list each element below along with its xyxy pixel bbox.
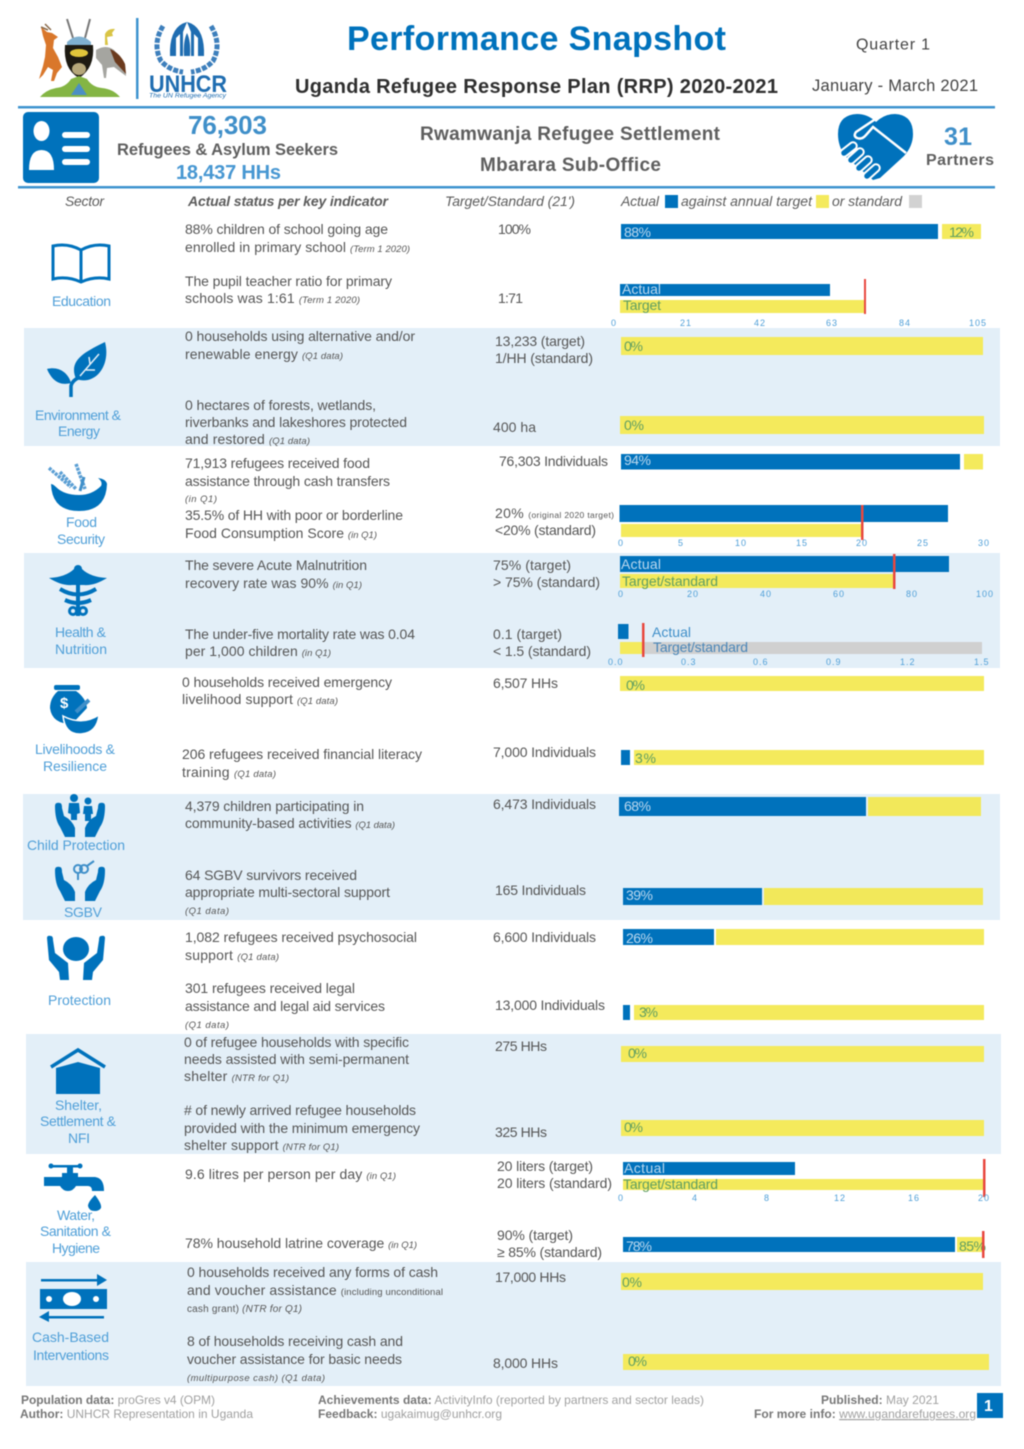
icon: hands with children xyxy=(55,794,105,837)
indicator: under-five mortality: The under-five mortality rate was 0.04 xyxy=(185,626,415,642)
indicator: pupil teacher ratio xyxy=(185,273,987,328)
sector label: Protection: Protection xyxy=(48,992,111,1008)
sector label: Water, Sanitation and Hygiene xyxy=(40,1207,112,1256)
indicator: legal assistance: 3% xyxy=(639,1004,658,1020)
indicator: food consumption score xyxy=(185,505,990,548)
indicator: basic needs: 8 of households receiving cash and xyxy=(187,1333,403,1349)
icon: caduceus xyxy=(49,565,107,616)
indicator: malnutrition recovery: 100 xyxy=(976,589,994,599)
icon: house xyxy=(51,1050,105,1094)
indicator: malnutrition recovery: 80 xyxy=(906,589,918,599)
icon: food bowl xyxy=(49,464,107,511)
column headers and legend: Sector xyxy=(65,193,105,209)
indicator: litres per day: 12 xyxy=(834,1193,846,1203)
indicator: latrine coverage: 78% xyxy=(626,1238,652,1254)
panel: livelihoods and resilience xyxy=(35,674,984,780)
sector label: Livelihoods and Resilience: Resilience xyxy=(43,758,107,774)
sector label: Food Security: Security xyxy=(57,531,105,547)
indicator: food assistance xyxy=(185,452,983,505)
indicator: renewable energy xyxy=(185,328,983,366)
column headers and legend: against annual target xyxy=(681,193,813,209)
indicator: renewable energy: 1/HH (standard) xyxy=(495,350,593,366)
indicator: renewable energy: 0 households using alternative and/or xyxy=(185,328,415,344)
column headers and legend: or standard xyxy=(832,193,903,209)
indicator: hectares protected: 0% xyxy=(624,417,644,433)
indicator: food consumption score: 10 xyxy=(735,538,747,548)
indicator: community activities: 4,379 children participating in xyxy=(185,798,364,814)
logo: UNHCR xyxy=(149,22,227,100)
indicator: pupil teacher ratio: 84 xyxy=(899,318,911,328)
indicator: SGBV support: 64 SGBV survivors received xyxy=(185,867,357,883)
indicator: under-five mortality: 1.5 xyxy=(974,657,990,667)
indicator: semi-permanent shelter: needs assisted with semi-permanent xyxy=(184,1051,409,1067)
indicator: malnutrition recovery: Target/standard xyxy=(622,573,718,589)
indicator: emergency shelter: shelter support (NTR for Q1) xyxy=(184,1137,339,1153)
indicator: semi-permanent shelter: 0 of refugee households with specific xyxy=(184,1034,409,1050)
indicator: pupil teacher ratio: 42 xyxy=(754,318,766,328)
indicator: under-five mortality: 0.1 (target) xyxy=(493,626,562,642)
indicator: psychosocial support: 26% xyxy=(626,930,653,946)
logo: UNHCR: UNHCR xyxy=(149,71,227,98)
indicator: food consumption score: 0 xyxy=(618,538,624,548)
icon: book xyxy=(53,245,109,282)
indicator: under-five mortality: 0.0 xyxy=(608,657,624,667)
indicator: malnutrition recovery: recovery rate was 90% (in Q1) xyxy=(185,575,362,591)
indicator: litres per day xyxy=(185,1158,990,1203)
indicator: under-five mortality: Target/standard xyxy=(653,639,748,655)
indicator: malnutrition recovery xyxy=(185,554,994,599)
quarter: Quarter 1 xyxy=(856,36,930,54)
sector label: Child Protection: Child Protection xyxy=(27,837,125,853)
indicator: malnutrition recovery: Actual xyxy=(621,556,661,572)
indicator: cash and voucher: 17,000 HHs xyxy=(495,1269,566,1285)
indicator: enrolment: 88% xyxy=(624,224,651,240)
indicator: basic needs: 0% xyxy=(628,1353,647,1369)
indicator: legal assistance: assistance and legal aid services xyxy=(185,998,385,1014)
indicator: financial literacy: training (Q1 data) xyxy=(182,764,276,780)
indicator: financial literacy: 206 refugees received financial literacy xyxy=(182,746,422,762)
header xyxy=(39,18,978,100)
indicator: food consumption score: 25 xyxy=(917,538,929,548)
indicator: hectares protected: 400 ha xyxy=(493,419,536,435)
indicator: cash and voucher: and voucher assistance (including unconditional xyxy=(187,1282,443,1298)
indicator: malnutrition recovery: 60 xyxy=(833,589,845,599)
indicator: renewable energy: 13,233 (target) xyxy=(495,333,585,349)
column headers and legend: Actual status per key indicator xyxy=(187,193,390,209)
icon: money bag and bowl: $ xyxy=(60,695,69,712)
indicator: malnutrition recovery: 40 xyxy=(760,589,772,599)
sector label: Cash-Based Interventions: Interventions xyxy=(33,1347,109,1363)
indicator: semi-permanent shelter: shelter (NTR for Q1) xyxy=(184,1068,289,1084)
sector label: Water, Sanitation and Hygiene: Water, xyxy=(57,1207,95,1223)
indicator: under-five mortality xyxy=(185,623,990,667)
indicator: cash and voucher xyxy=(187,1264,983,1315)
page number: 1 xyxy=(984,1398,993,1415)
indicator: community activities: 68% xyxy=(624,798,651,814)
indicator: legal assistance: 301 refugees received legal xyxy=(185,980,355,996)
footer: achievements source: Achievements data: ActivityInfo (reported by partners and sector leads) xyxy=(318,1393,704,1407)
indicator: food assistance: 76,303 Individuals xyxy=(499,453,608,469)
sector label: Cash-Based Interventions xyxy=(32,1329,109,1363)
indicator: pupil teacher ratio: The pupil teacher ratio for primary xyxy=(185,273,392,289)
footer xyxy=(20,1393,1003,1421)
panel: health and nutrition xyxy=(24,553,1000,668)
indicator: SGBV support: appropriate multi-sectoral support xyxy=(185,884,390,900)
icon: banknote with arrows xyxy=(39,1274,107,1322)
panel: water, sanitation and hygiene xyxy=(40,1158,990,1260)
indicator: food assistance: 94% xyxy=(624,452,651,468)
indicator: emergency shelter: 325 HHs xyxy=(495,1124,547,1140)
icon: people list xyxy=(23,112,99,183)
indicator: livelihood support xyxy=(182,674,984,707)
icon: hands with gender symbols xyxy=(55,861,105,901)
indicator: hectares protected: and restored (Q1 data) xyxy=(185,431,310,447)
indicator: pupil teacher ratio: 0 xyxy=(611,318,617,328)
indicator: latrine coverage: 78% household latrine coverage (in Q1) xyxy=(185,1235,417,1251)
sector label: Cash-Based Interventions: Cash-Based xyxy=(32,1329,109,1345)
partners label: Partners xyxy=(926,152,994,169)
indicator: financial literacy: 7,000 Individuals xyxy=(493,744,596,760)
indicator: malnutrition recovery: 0 xyxy=(618,589,624,599)
indicator: legal assistance xyxy=(185,980,984,1031)
indicator: litres per day: 20 xyxy=(978,1193,990,1203)
column headers and legend: Actual xyxy=(620,193,660,209)
indicator: under-five mortality: < 1.5 (standard) xyxy=(493,643,591,659)
indicator: emergency shelter: 0% xyxy=(624,1119,643,1135)
panel: food security xyxy=(49,452,990,548)
indicator: latrine coverage xyxy=(185,1227,986,1260)
sector label: Shelter, Settlement and NFI xyxy=(40,1097,117,1146)
settlement name: Rwamwanja Refugee Settlement xyxy=(420,124,721,145)
indicator: cash and voucher: 0% xyxy=(622,1274,642,1290)
indicator: under-five mortality: 0.3 xyxy=(681,657,697,667)
sector label: Food Security xyxy=(57,514,105,547)
panel: child protection and SGBV xyxy=(23,794,1000,920)
indicator: food consumption score: 5 xyxy=(678,538,684,548)
logo: Uganda coat of arms xyxy=(39,19,126,97)
icon: money bag and bowl xyxy=(50,685,99,734)
indicator: enrolment: enrolled in primary school (Term 1 2020) xyxy=(185,239,410,255)
indicator: under-five mortality: 0.9 xyxy=(826,657,842,667)
indicator: financial literacy xyxy=(182,744,984,780)
indicator: pupil teacher ratio: schools was 1:61 (Term 1 2020) xyxy=(185,290,360,306)
footer: published: Published: May 2021 xyxy=(821,1393,939,1407)
indicator: pupil teacher ratio: 1:71 xyxy=(498,290,523,306)
period: January - March 2021 xyxy=(812,77,978,95)
sector label: Environment and Energy: Energy xyxy=(58,423,100,439)
indicator: basic needs: 8,000 HHs xyxy=(493,1355,558,1371)
indicator: livelihood support: 0% xyxy=(626,677,645,693)
indicator: latrine coverage: ≥ 85% (standard) xyxy=(497,1244,602,1260)
logo divider xyxy=(136,18,138,99)
sector label: Health and Nutrition: Nutrition xyxy=(55,641,107,657)
population count: 76,303 xyxy=(188,110,267,140)
indicator: litres per day: Actual xyxy=(624,1160,665,1176)
sector label: Health and Nutrition xyxy=(55,624,107,657)
sector label: Health and Nutrition: Health & xyxy=(55,624,107,640)
icon: hands with circle xyxy=(47,936,105,980)
indicator: basic needs: voucher assistance for basic needs xyxy=(187,1351,402,1367)
indicator: community activities xyxy=(185,796,981,831)
indicator: hectares protected xyxy=(185,397,984,447)
page number xyxy=(977,1393,1003,1418)
indicator: semi-permanent shelter: 0% xyxy=(628,1045,647,1061)
column headers and legend xyxy=(65,193,922,209)
panel: education xyxy=(52,221,987,328)
indicator: pupil teacher ratio: 105 xyxy=(969,318,987,328)
sector label: Shelter, Settlement and NFI: Settlement & xyxy=(40,1113,117,1129)
indicator: basic needs: (multipurpose cash) (Q1 data) xyxy=(187,1373,325,1384)
indicator: food consumption score: 20 xyxy=(856,538,868,548)
sector label: Shelter, Settlement and NFI: Shelter, xyxy=(55,1097,102,1113)
indicator: latrine coverage: 85% xyxy=(959,1238,986,1254)
sector label: Food Security: Food xyxy=(66,514,97,530)
indicator: psychosocial support xyxy=(185,929,984,963)
indicator: under-five mortality: 0.6 xyxy=(753,657,769,667)
indicator: emergency shelter xyxy=(184,1102,984,1153)
indicator: SGBV support: 39% xyxy=(626,887,653,903)
indicator: pupil teacher ratio: Target xyxy=(623,297,661,313)
indicator: psychosocial support: support (Q1 data) xyxy=(185,947,279,963)
footer: population source: Population data: proGres v4 (OPM) xyxy=(21,1393,215,1407)
indicator: legal assistance: 13,000 Individuals xyxy=(495,997,605,1013)
sector label: Shelter, Settlement and NFI: NFI xyxy=(68,1130,90,1146)
indicator: emergency shelter: # of newly arrived refugee households xyxy=(184,1102,416,1118)
indicator: under-five mortality: Actual xyxy=(652,624,691,640)
indicator: enrolment: 12% xyxy=(949,224,974,240)
indicator: pupil teacher ratio: 21 xyxy=(680,318,692,328)
logo: UNHCR: The UN Refugee Agency xyxy=(149,94,227,100)
indicator: malnutrition recovery: 20 xyxy=(687,589,699,599)
indicator: enrolment: 100% xyxy=(498,221,531,237)
indicator: semi-permanent shelter xyxy=(184,1034,984,1084)
indicator: litres per day: 0 xyxy=(618,1193,624,1203)
sector label: Livelihoods and Resilience xyxy=(35,741,116,774)
column headers and legend: Target/Standard (21') xyxy=(445,193,575,209)
indicator: food consumption score: 35.5% of HH with poor or borderline xyxy=(185,507,403,523)
indicator: litres per day: Target/standard xyxy=(623,1176,718,1192)
indicator: livelihood support: 0 households received emergency xyxy=(182,674,392,690)
sector label: Education: Education xyxy=(52,293,111,309)
icon: handshake heart xyxy=(838,114,913,180)
indicator: litres per day: 4 xyxy=(692,1193,698,1203)
indicator: food assistance: (in Q1) xyxy=(185,494,217,505)
subtitle: Uganda Refugee Response Plan (RRP) 2020-2021 xyxy=(295,76,778,98)
sector label: Environment and Energy xyxy=(35,407,122,439)
indicator: pupil teacher ratio: 63 xyxy=(826,318,838,328)
indicator: litres per day: 8 xyxy=(764,1193,770,1203)
indicator: food consumption score: 30 xyxy=(978,538,990,548)
sector label: Water, Sanitation and Hygiene: Hygiene xyxy=(52,1240,100,1256)
indicator: renewable energy: renewable energy (Q1 data) xyxy=(185,346,343,362)
icon: leaves xyxy=(47,342,106,397)
indicator: SGBV support: 165 Individuals xyxy=(495,882,586,898)
indicator: cash and voucher: 0 households received any forms of cash xyxy=(187,1264,438,1280)
indicator: litres per day: 16 xyxy=(908,1193,920,1203)
footer: more info: For more info: www.ugandarefugees.org xyxy=(754,1407,976,1421)
indicator: food consumption score: 20% (original 2020 target) xyxy=(495,505,614,521)
indicator: SGBV support xyxy=(185,867,983,917)
icon: tap with drop xyxy=(44,1164,104,1211)
indicator: hectares protected: 0 hectares of forests, wetlands, xyxy=(185,397,376,413)
indicator: psychosocial support: 1,082 refugees received psychosocial xyxy=(185,929,417,945)
indicator: litres per day: 20 liters (target) xyxy=(497,1158,593,1174)
indicator: food assistance: 71,913 refugees received food xyxy=(185,455,370,471)
indicator: legal assistance: (Q1 data) xyxy=(185,1020,229,1031)
indicator: community activities: community-based activities (Q1 data) xyxy=(185,815,395,831)
indicator: malnutrition recovery: > 75% (standard) xyxy=(493,574,600,590)
summary strip xyxy=(23,110,994,184)
indicator: community activities: 6,473 Individuals xyxy=(493,796,596,812)
indicator: malnutrition recovery: The severe Acute Malnutrition xyxy=(185,557,367,573)
indicator: food consumption score: Food Consumption Score (in Q1) xyxy=(185,525,377,541)
sector label: Water, Sanitation and Hygiene: Sanitation & xyxy=(40,1223,112,1239)
indicator: hectares protected: riverbanks and lakeshores protected xyxy=(185,414,407,430)
indicator: food assistance: assistance through cash transfers xyxy=(185,473,390,489)
indicator: semi-permanent shelter: 275 HHs xyxy=(495,1038,547,1054)
indicator: cash and voucher: cash grant) (NTR for Q1) xyxy=(187,1304,302,1315)
indicator: litres per day: 9.6 litres per person per day (in Q1) xyxy=(185,1166,396,1182)
indicator: pupil teacher ratio: Actual xyxy=(622,281,661,297)
title: Performance Snapshot xyxy=(347,20,726,58)
panel: shelter, settlement and NFI xyxy=(26,1034,1001,1154)
indicator: renewable energy: 0% xyxy=(624,338,643,354)
sector label: Livelihoods and Resilience: Livelihoods & xyxy=(35,741,116,757)
sector label: Environment and Energy: Environment & xyxy=(35,407,122,423)
population label: Refugees & Asylum Seekers xyxy=(117,141,338,159)
indicator: food consumption score: <20% (standard) xyxy=(495,522,596,538)
household count: 18,437 HHs xyxy=(176,162,281,184)
indicator: under-five mortality: 1.2 xyxy=(900,657,916,667)
indicator: financial literacy: 3% xyxy=(635,750,656,766)
indicator: food consumption score: 15 xyxy=(796,538,808,548)
footer: author: Author: UNHCR Representation in Uganda xyxy=(20,1407,253,1421)
sector label: SGBV: SGBV xyxy=(64,904,103,920)
indicator: SGBV support: (Q1 data) xyxy=(185,906,229,917)
indicator: litres per day: 20 liters (standard) xyxy=(497,1175,612,1191)
indicator: latrine coverage: 90% (target) xyxy=(497,1227,573,1243)
indicator: livelihood support: livelihood support (Q1 data) xyxy=(182,691,338,707)
panel: protection xyxy=(47,929,984,1031)
footer: feedback: Feedback: ugakaimug@unhcr.org xyxy=(318,1407,502,1421)
indicator: enrolment: 88% children of school going age xyxy=(185,221,388,237)
indicator: livelihood support: 6,507 HHs xyxy=(493,675,558,691)
partners count: 31 xyxy=(944,123,972,151)
indicator: basic needs xyxy=(187,1333,989,1384)
indicator: under-five mortality: per 1,000 children (in Q1) xyxy=(185,643,331,659)
panel: cash-based interventions xyxy=(26,1262,1001,1386)
indicator: enrolment xyxy=(185,221,981,255)
indicator: malnutrition recovery: 75% (target) xyxy=(493,557,571,573)
indicator: emergency shelter: provided with the minimum emergency xyxy=(184,1120,420,1136)
indicator: psychosocial support: 6,600 Individuals xyxy=(493,929,596,945)
sub-office name: Mbarara Sub-Office xyxy=(480,155,661,176)
panel: environment and energy xyxy=(24,328,1000,447)
